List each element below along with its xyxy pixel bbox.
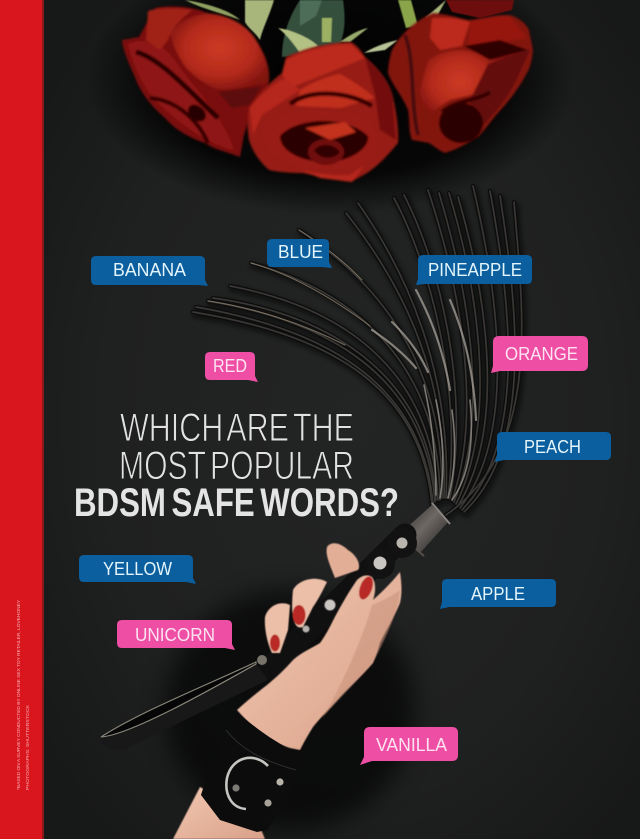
nails [270, 575, 376, 652]
palm [237, 572, 402, 750]
cuff ring [226, 758, 268, 809]
bubble: yellow [79, 555, 196, 584]
whip handle [270, 503, 450, 668]
rose: back top [446, 0, 514, 18]
bubble: banana: BANANA [113, 260, 186, 280]
leaves and stems [185, 0, 446, 58]
title [74, 406, 399, 525]
bubble: banana [91, 256, 208, 286]
bubble: peach: PEACH [524, 437, 581, 457]
bubble: blue: BLUE [278, 242, 323, 262]
palm shading [322, 590, 400, 718]
bubble: vanilla [360, 727, 458, 765]
title: MOST POPULAR [119, 444, 354, 488]
bubble: peach [495, 432, 611, 462]
bubble: blue [267, 239, 332, 268]
bubble: apple: APPLE [471, 584, 525, 604]
bubble: orange: ORANGE [505, 344, 578, 364]
bubble: vanilla: VANILLA [376, 735, 447, 755]
title: WHICH ARE THE [120, 406, 354, 450]
bubble: apple [440, 579, 556, 609]
bubble: red [205, 352, 258, 382]
bubble: unicorn [117, 620, 235, 650]
rose: left [122, 6, 269, 157]
shadow behind hand [165, 590, 415, 830]
roses [85, 0, 575, 215]
bubble: pineapple [416, 255, 532, 285]
hand [173, 543, 402, 839]
rose: center [248, 42, 398, 182]
bubble: orange [491, 336, 588, 373]
bubble: red: RED [213, 356, 247, 376]
footnote [16, 600, 30, 790]
leather cuff [201, 712, 310, 832]
footnote: PHOTOGRAPHS: SHUTTERSTOCK [25, 704, 30, 790]
title: BDSM SAFE WORDS? [74, 481, 399, 525]
bubble: yellow: YELLOW [103, 559, 172, 579]
handle studs between fingers [324, 600, 336, 610]
bubble: unicorn: UNICORN [135, 625, 215, 645]
strand highlights [208, 230, 476, 500]
fingers [327, 543, 359, 578]
whip strands [193, 186, 524, 518]
wrist loop strap [101, 655, 268, 750]
side bar [0, 0, 44, 839]
forearm [173, 787, 265, 839]
bubble: pineapple: PINEAPPLE [428, 260, 522, 280]
footnote: *BASED ON A SURVEY CONDUCTED BY ONLINE SEX TOY RETAILER, LOVEHONEY [16, 600, 21, 790]
rose: right [388, 13, 533, 153]
